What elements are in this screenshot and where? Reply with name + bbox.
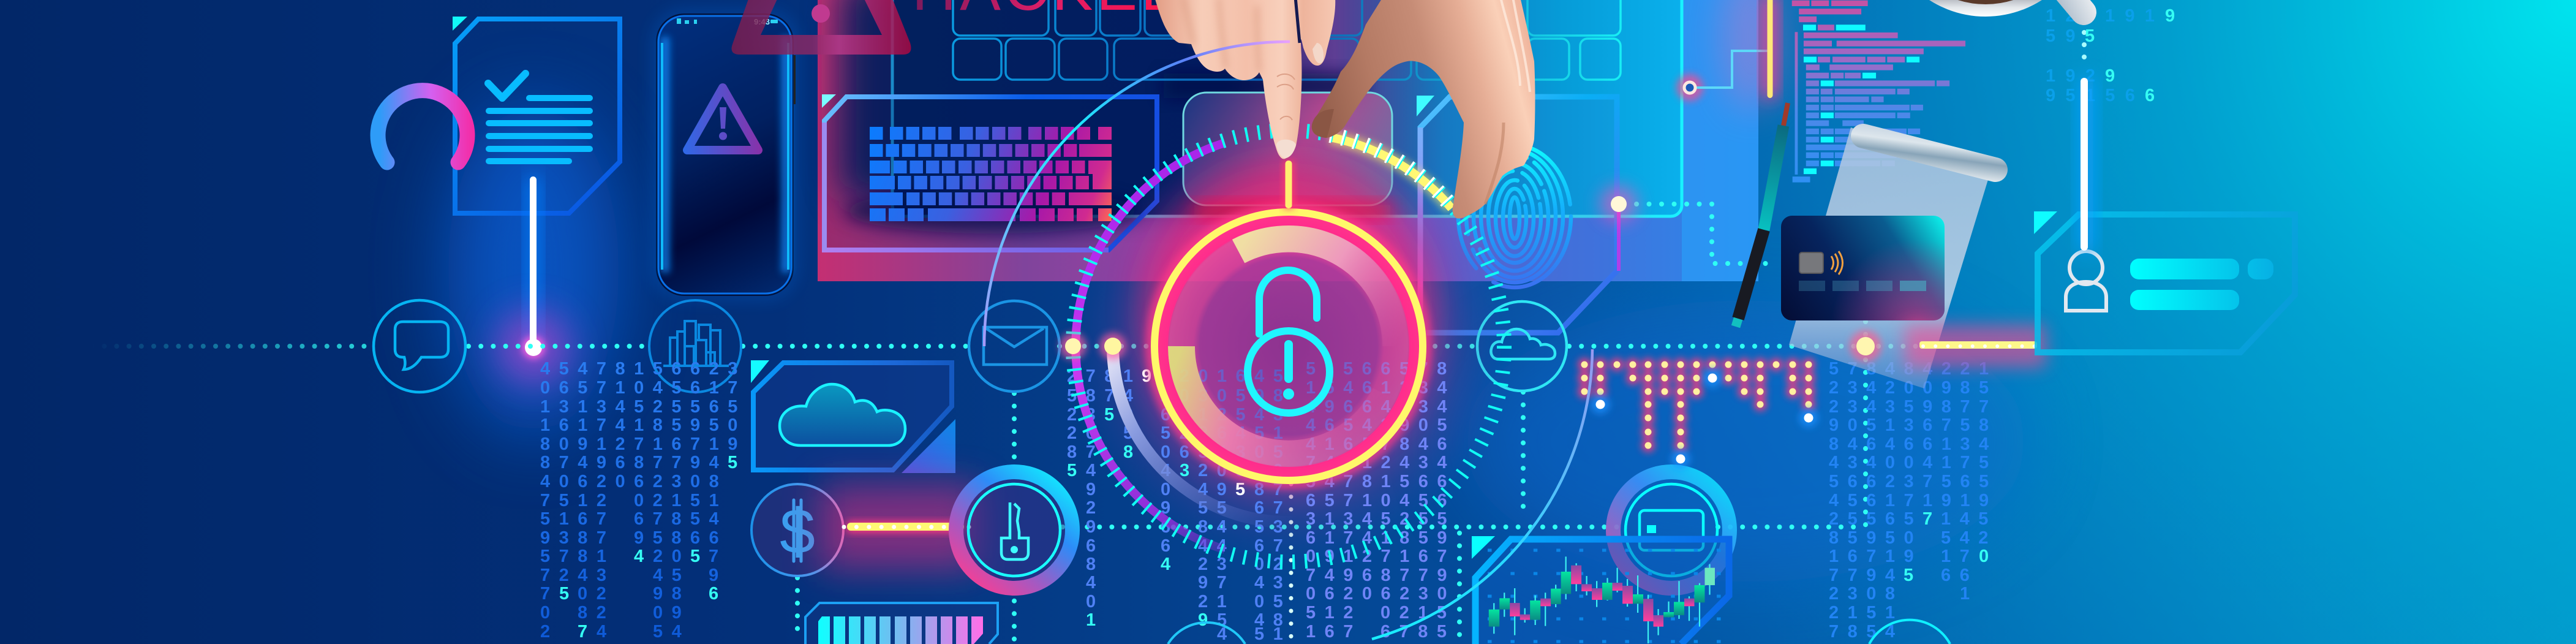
- digit grid: centre left: 5: [1104, 405, 1123, 425]
- icon: dollar circle: $: [780, 496, 815, 567]
- digit grid: centre left: 9: [1086, 517, 1105, 537]
- digit grid: left: 2: [540, 622, 559, 642]
- icon: check mark: [488, 74, 525, 98]
- digit grid: centre left: 21: [1198, 592, 1235, 612]
- card number blocks: [1799, 281, 1926, 291]
- digit grid: centre left: [1067, 366, 1292, 644]
- digit grid: left: 98: [653, 584, 690, 604]
- digit grid: left: 45: [653, 566, 690, 585]
- digit grid: upper right: 12: [2046, 6, 2085, 26]
- digit grid: centre right: 0215: [1380, 603, 1456, 623]
- digit grid: centre right: 54781566: [1306, 472, 1456, 491]
- digit grid: left: 9387: [540, 528, 616, 548]
- digit grid: centre right: 09127167: [1306, 547, 1456, 566]
- digit grid: right: 25565: [1829, 509, 1923, 529]
- magnifying glass: [1888, 0, 2084, 12]
- white connector line to user: [2079, 78, 2094, 251]
- digit grid: centre left: 87: [1067, 442, 1104, 462]
- digit grid: left: 82: [578, 603, 615, 623]
- digit grid: left: 45478156623: [540, 359, 747, 379]
- digit grid: upper right: 95156: [2046, 86, 2145, 105]
- digit grid: centre left: 6: [1161, 536, 1180, 556]
- panel: laptop screen: [892, 0, 1682, 216]
- digit grid: right: 578484221: [1829, 359, 1998, 379]
- digit grid: right: 0: [1979, 547, 1998, 566]
- digit grid: right: 66: [1941, 566, 1978, 585]
- panel: keyboard frame: [822, 94, 1157, 252]
- digit grid: right: 846466134: [1829, 434, 1998, 454]
- digit grid: centre right: 74512434: [1306, 453, 1456, 472]
- digit grid: centre left: 4: [1086, 573, 1105, 593]
- digit grid: centre left: 8: [1123, 442, 1142, 462]
- digit grid: left: 13134525565: [540, 397, 747, 417]
- digit grid: left: 95866: [634, 528, 728, 548]
- digit grid: centre left: 67: [1254, 498, 1292, 518]
- digit grid: left: 7243: [540, 566, 616, 585]
- digit grid: right: 905136758: [1829, 415, 1998, 435]
- digit grid: right: 2151: [1829, 603, 1904, 623]
- icon: small bottom circle left: [1168, 623, 1245, 644]
- digit grid: centre left: 0654305: [1161, 442, 1292, 462]
- digit grid: centre left: 6: [1161, 517, 1180, 537]
- digit grid: centre right: 06206230: [1306, 584, 1456, 604]
- digit grid: centre left: 5874: [1067, 386, 1142, 406]
- icon: small bottom circle right: [1869, 620, 1950, 644]
- digit grid: upper right: 5: [2085, 26, 2104, 46]
- icon: user: [2066, 251, 2106, 311]
- candlesticks: [1489, 556, 1715, 643]
- digit grid: centre left: 0: [1086, 592, 1105, 612]
- dial connector stem: [1284, 161, 1294, 208]
- digit grid: centre left: 44: [1198, 536, 1235, 556]
- digit grid: right: 1: [1960, 584, 1979, 604]
- digit grid: centre right: 15461234: [1306, 378, 1456, 398]
- glowing nodes on main line: [1060, 333, 1126, 360]
- digit grid: right: 234200985: [1829, 378, 1998, 398]
- icon: envelope circle: [969, 301, 1060, 392]
- digit grid: centre left: 9: [1198, 610, 1217, 630]
- hand: left pointing fingers: [1154, 0, 1335, 159]
- digit grid: right: 234359877: [1829, 397, 1998, 417]
- digit grid: centre left: 9: [1142, 366, 1161, 386]
- digit grid: left: 02151: [634, 491, 728, 510]
- white connector line from document: [497, 176, 570, 384]
- digit grid: centre left: 1201645: [1161, 366, 1292, 386]
- digit grid: centre right: [1306, 359, 1456, 642]
- digit grid: centre left: 0: [1161, 480, 1180, 499]
- digit grid: left: 20: [653, 547, 690, 566]
- digit grid: left: 8749687794: [540, 453, 728, 472]
- digit grid: centre right: 512: [1306, 603, 1362, 623]
- digit grid: centre right: 49664234: [1306, 397, 1456, 417]
- panel: stock chart: [1472, 536, 1729, 644]
- icon: fingerprint: [1458, 145, 1571, 287]
- digit grid: centre left: 67: [1254, 536, 1292, 556]
- digit grid: upper right: 192: [2046, 66, 2105, 86]
- card chip: [1799, 252, 1823, 273]
- digit grid: centre left: 2: [1086, 498, 1105, 518]
- digit grid: left: 02: [578, 584, 615, 604]
- credit card: [1781, 216, 1945, 320]
- digit grid: centre left: 5: [1067, 461, 1086, 480]
- document text lines: [489, 98, 590, 161]
- digit grid: centre left: 49: [1198, 480, 1235, 499]
- digit grid: right: 17: [1941, 547, 1978, 566]
- digit grid: right: [1829, 359, 1998, 642]
- lock aura glow: [1076, 134, 1501, 559]
- digit grid: right: 7794: [1829, 566, 1904, 585]
- digit grid: centre left: 23: [1198, 555, 1235, 574]
- digit grid: centre right: 6785: [1380, 622, 1456, 642]
- digit grid: right: 5: [1904, 566, 1923, 585]
- digit grid: upper right: [2046, 6, 2185, 105]
- digit grid: centre left: 48: [1254, 610, 1292, 630]
- panel: laptop backdrop: [818, 0, 1782, 281]
- panel: cloud card: [751, 360, 955, 473]
- digit grid: centre left: 9: [1086, 480, 1105, 499]
- digit grid: left: 4: [634, 547, 653, 566]
- digit grid: centre right: 566578: [1343, 359, 1456, 379]
- digit grid: left: 5167: [540, 509, 616, 529]
- icon: open padlock: [1248, 270, 1330, 413]
- pen: [1736, 103, 1788, 327]
- digit grid: left: 5: [728, 453, 747, 472]
- digit grid: centre right: 46543905: [1306, 415, 1456, 435]
- digit grid: centre right: 41657846: [1306, 434, 1456, 454]
- digit grid: left: 5781: [540, 547, 616, 566]
- laptop keyboard key outlines: [953, 0, 1621, 80]
- icon: chat circle: [374, 300, 465, 392]
- LED dot matrix: [1584, 365, 1809, 459]
- digit grid: right: 145: [1941, 509, 1997, 529]
- digit grid: centre left: 84: [1198, 517, 1235, 537]
- large thin circle arcs: [984, 42, 1592, 639]
- icon: large warning triangle: [731, 0, 911, 55]
- digit grid: centre left: 53: [1254, 517, 1292, 537]
- digit grid: upper right: 9: [2105, 66, 2125, 86]
- digit grid: centre left: 20: [1067, 423, 1104, 443]
- icon: cloud circle right: [1477, 301, 1567, 391]
- glowing vertical yellow bar: [1764, 0, 1776, 98]
- main line yellow connector and node: [1850, 325, 2046, 368]
- icon: cloud: [780, 384, 905, 445]
- icon: keyboard keys: [845, 127, 1139, 233]
- digit grid: left: 6: [709, 584, 728, 604]
- digit grid: left: 7: [709, 547, 728, 566]
- digit grid: centre left: 5: [1217, 610, 1236, 630]
- digit grid: centre left: 4: [1161, 461, 1180, 480]
- panel: fingerprint frame: [1417, 96, 1617, 333]
- digit grid: left: 09: [653, 603, 690, 623]
- touchpad: [1183, 93, 1392, 205]
- icon: phone: [656, 13, 796, 296]
- digit grid: centre right: 61741859: [1306, 528, 1456, 548]
- profile bars: [2130, 259, 2273, 310]
- digit grid: centre left: 3: [1180, 461, 1199, 480]
- paper scroll: [1789, 127, 1995, 388]
- digit grid: right: 566237565: [1829, 472, 1998, 491]
- tick ring: [1073, 131, 1504, 562]
- digit grid: centre left: 20530: [1198, 461, 1292, 480]
- panel: user profile card: [2034, 211, 2295, 352]
- icon: dollar circle: [751, 484, 843, 576]
- digit grid: left: 06571045617: [540, 378, 747, 398]
- digit grid: centre left: 4: [1217, 624, 1236, 644]
- phone status time: 9:43: [754, 17, 770, 26]
- digit grid: centre left: 9: [1161, 498, 1180, 518]
- digit grid: upper right: 9: [2165, 6, 2185, 26]
- code listing: [1792, 1, 1965, 183]
- digit grid: centre left: 1: [1086, 610, 1105, 630]
- hand: right hand with thumb: [1312, 0, 1535, 219]
- lock gauge dial: [1113, 210, 1425, 522]
- digit grid: centre left: 6: [1086, 536, 1105, 556]
- digit grid: right: 434004175: [1829, 453, 1998, 472]
- digit grid: centre left: 23: [1067, 405, 1104, 425]
- digit grid: centre left: 4: [1086, 461, 1105, 480]
- digit grid: centre right: 167: [1306, 622, 1362, 642]
- digit grid: centre left: 2030598: [1161, 386, 1292, 406]
- digit grid: left: [540, 359, 747, 642]
- digit grid: left: 4: [597, 622, 616, 642]
- digit grid: centre left: 02: [1254, 555, 1292, 574]
- phone status icons: [677, 18, 778, 24]
- digit grid: upper right: 6: [2145, 86, 2164, 105]
- digit grid: left: 9: [709, 566, 728, 585]
- digit grid: left: 4062062308: [540, 472, 728, 491]
- digit grid: left: 80912716719: [540, 434, 747, 454]
- icon: key circle: [956, 472, 1072, 588]
- digit grid: centre left: 51: [1254, 624, 1292, 644]
- digit grid: left: 0: [540, 603, 559, 623]
- digit grid: left: 7: [540, 584, 559, 604]
- digit grid: centre left: 43: [1254, 573, 1292, 593]
- gauge arc: [378, 91, 467, 162]
- digit grid: left: 16174185950: [540, 415, 747, 435]
- digit grid: left: 54: [653, 622, 690, 642]
- dotted network lines: [92, 8, 2084, 641]
- digit grid: left: 5: [559, 584, 578, 604]
- digit grid: right: 16719: [1829, 547, 1923, 566]
- digit grid: left: 5: [690, 547, 709, 566]
- digit grid: centre right: 31345255: [1306, 509, 1456, 529]
- digit grid: centre left: 87: [1254, 480, 1292, 499]
- digit grid: right: 456171919: [1829, 491, 1998, 510]
- digit grid: centre left: 97: [1198, 573, 1235, 593]
- digit grid: right: 2308: [1829, 584, 1904, 604]
- panel: document: [453, 17, 620, 213]
- digit grid: centre right: 5: [1306, 359, 1325, 379]
- icon: phone warning triangle: [687, 88, 758, 150]
- digit grid: centre right: 74968779: [1306, 566, 1456, 585]
- digit grid: centre left: 6012543: [1161, 405, 1292, 425]
- digit grid: centre left: 5286451: [1161, 423, 1292, 443]
- digit grid: centre left: 05: [1254, 592, 1292, 612]
- panel: battery bars: [805, 603, 998, 644]
- circuit connector with ring node: [1676, 51, 1770, 101]
- card contactless mark: [1831, 251, 1842, 275]
- digit grid: upper right: 59: [2046, 26, 2085, 46]
- digit grid: left: 67854: [634, 509, 728, 529]
- digit grid: centre left: 9: [1123, 405, 1142, 425]
- digit grid: left: 7: [578, 622, 597, 642]
- icon: credit card circle: [1613, 472, 1730, 588]
- digit grid: centre left: 5: [1235, 480, 1254, 499]
- digit grid: centre left: 5: [1123, 423, 1142, 443]
- icon: buildings circle: [649, 300, 741, 392]
- digit grid: right: 7: [1923, 509, 1941, 529]
- digit grid: right: 542: [1941, 528, 1997, 548]
- laptop glowing node: [1600, 186, 1637, 271]
- digit grid: left: 7512: [540, 491, 616, 510]
- digit grid: upper right: 191: [2105, 6, 2164, 26]
- digit grid: centre right: 65710456: [1306, 491, 1456, 510]
- glowing yellow connector: [821, 484, 980, 570]
- digit grid: right: 7854: [1829, 622, 1904, 642]
- digit grid: centre left: 55: [1198, 498, 1235, 518]
- digit grid: right: 85950: [1829, 528, 1923, 548]
- digit grid: centre left: 8: [1086, 555, 1105, 574]
- digit grid: centre left: 2781: [1067, 366, 1142, 386]
- digit grid: centre left: 4: [1161, 555, 1180, 574]
